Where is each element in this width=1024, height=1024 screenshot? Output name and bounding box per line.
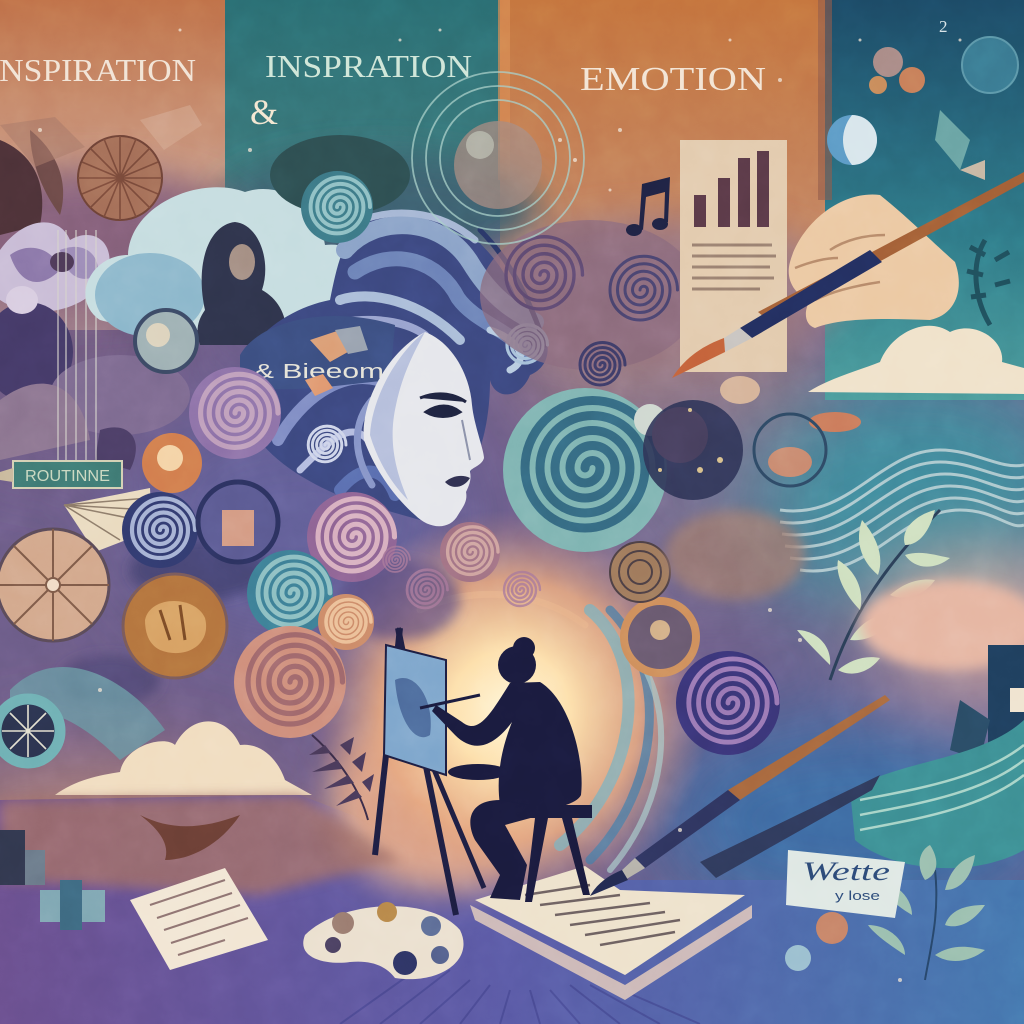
cloud shape xyxy=(85,187,387,330)
lower paintbrush xyxy=(590,695,890,896)
icon: orange ring xyxy=(624,601,696,673)
head xyxy=(498,646,536,684)
eye and brow xyxy=(420,394,466,416)
spiral: pink xyxy=(307,492,397,582)
document with bar chart xyxy=(680,140,787,372)
heading: inspiration centre: INSPRATION xyxy=(265,48,472,84)
spiral: small orange xyxy=(318,594,374,650)
bottom-left scene xyxy=(0,795,400,930)
decoration: small orange objects xyxy=(720,376,861,486)
icon: guitar strings xyxy=(58,230,96,460)
easel xyxy=(375,628,484,915)
icon: orange fist disc xyxy=(123,574,227,678)
hand with paintbrush xyxy=(672,172,1024,378)
hair bun xyxy=(513,637,535,659)
legs xyxy=(470,800,560,900)
green wave mound xyxy=(850,720,1024,868)
panel: floor xyxy=(0,795,1024,1024)
icon: teal wheel ring xyxy=(0,667,165,763)
icon: tan wheel xyxy=(0,529,109,641)
leaf branch xyxy=(797,510,950,680)
spiral: big teal disc xyxy=(503,388,667,552)
cloud with portrait xyxy=(85,187,387,345)
decoration: small faint swirls xyxy=(383,546,540,608)
lips xyxy=(445,476,470,487)
spiral: top teal xyxy=(270,135,410,243)
spiral: teal xyxy=(247,550,333,636)
decoration: top right blossoms xyxy=(869,37,1018,325)
building block far right xyxy=(950,645,1024,760)
label: routine sign: ROUTINNE xyxy=(25,468,110,485)
icon: glowing orange ball xyxy=(142,433,202,493)
icon: dotted brown circle xyxy=(610,542,670,602)
icon: planet xyxy=(827,115,877,165)
floor stripes xyxy=(340,960,700,1024)
cloud: right xyxy=(808,326,1024,394)
swirl lines around the glow xyxy=(420,594,661,870)
mixing palette xyxy=(448,764,508,780)
decoration: left flowers and leaves xyxy=(0,105,202,470)
cloud: far right pink xyxy=(860,580,1024,670)
spiral: mauve small xyxy=(440,522,500,582)
note card xyxy=(786,850,905,918)
icon: music note xyxy=(626,177,670,236)
heading: emotion: EMOTION xyxy=(580,61,766,98)
icon: concentric orbit circles xyxy=(412,72,584,244)
brush xyxy=(758,172,1024,322)
letter paper xyxy=(130,868,268,970)
nose shadow xyxy=(462,420,470,460)
small orange circle and flower xyxy=(785,912,848,971)
body xyxy=(432,682,582,810)
open book xyxy=(470,866,752,1000)
note subtitle: y lose xyxy=(835,888,880,903)
panel: top colour columns xyxy=(0,0,1024,400)
icon: grey ball xyxy=(135,310,197,372)
text lines xyxy=(692,245,776,289)
face xyxy=(364,332,484,526)
spiral: salmon xyxy=(234,626,346,738)
spiral: dark speckled disc xyxy=(643,400,743,500)
panel: warm glow behind artist xyxy=(310,510,710,910)
spiral: purple xyxy=(189,367,281,459)
hair mass xyxy=(239,211,548,520)
icon: feather fan xyxy=(64,488,152,552)
icon: framed ring xyxy=(198,482,278,562)
note title: Wette xyxy=(802,857,890,886)
dark strip bottom right xyxy=(700,775,880,878)
icon: brown radial wheel xyxy=(78,136,162,220)
stool xyxy=(520,805,592,902)
collage text: & Bieeom xyxy=(254,361,384,383)
cloud: bottom left xyxy=(55,721,312,795)
portrait xyxy=(198,222,286,345)
decoration: brown mist xyxy=(665,510,805,600)
decoration: dark fill between discs xyxy=(60,540,460,705)
palette xyxy=(303,902,464,979)
canvas xyxy=(384,645,446,775)
spiral: dark blue xyxy=(122,492,198,568)
bar chart xyxy=(694,151,769,227)
decoration: mauve swirl cluster xyxy=(480,220,700,385)
artist silhouette xyxy=(420,637,592,902)
wavy stripes xyxy=(780,450,1024,571)
small numeral: 2 xyxy=(939,17,948,36)
fern xyxy=(309,735,374,820)
leaf branch lower right xyxy=(868,845,985,980)
heading: ampersand: & xyxy=(250,92,278,132)
collage strip in hair xyxy=(240,316,395,396)
brush in hand xyxy=(420,695,480,708)
spiral: dark purple xyxy=(676,651,780,755)
label: routine sign xyxy=(0,461,122,488)
